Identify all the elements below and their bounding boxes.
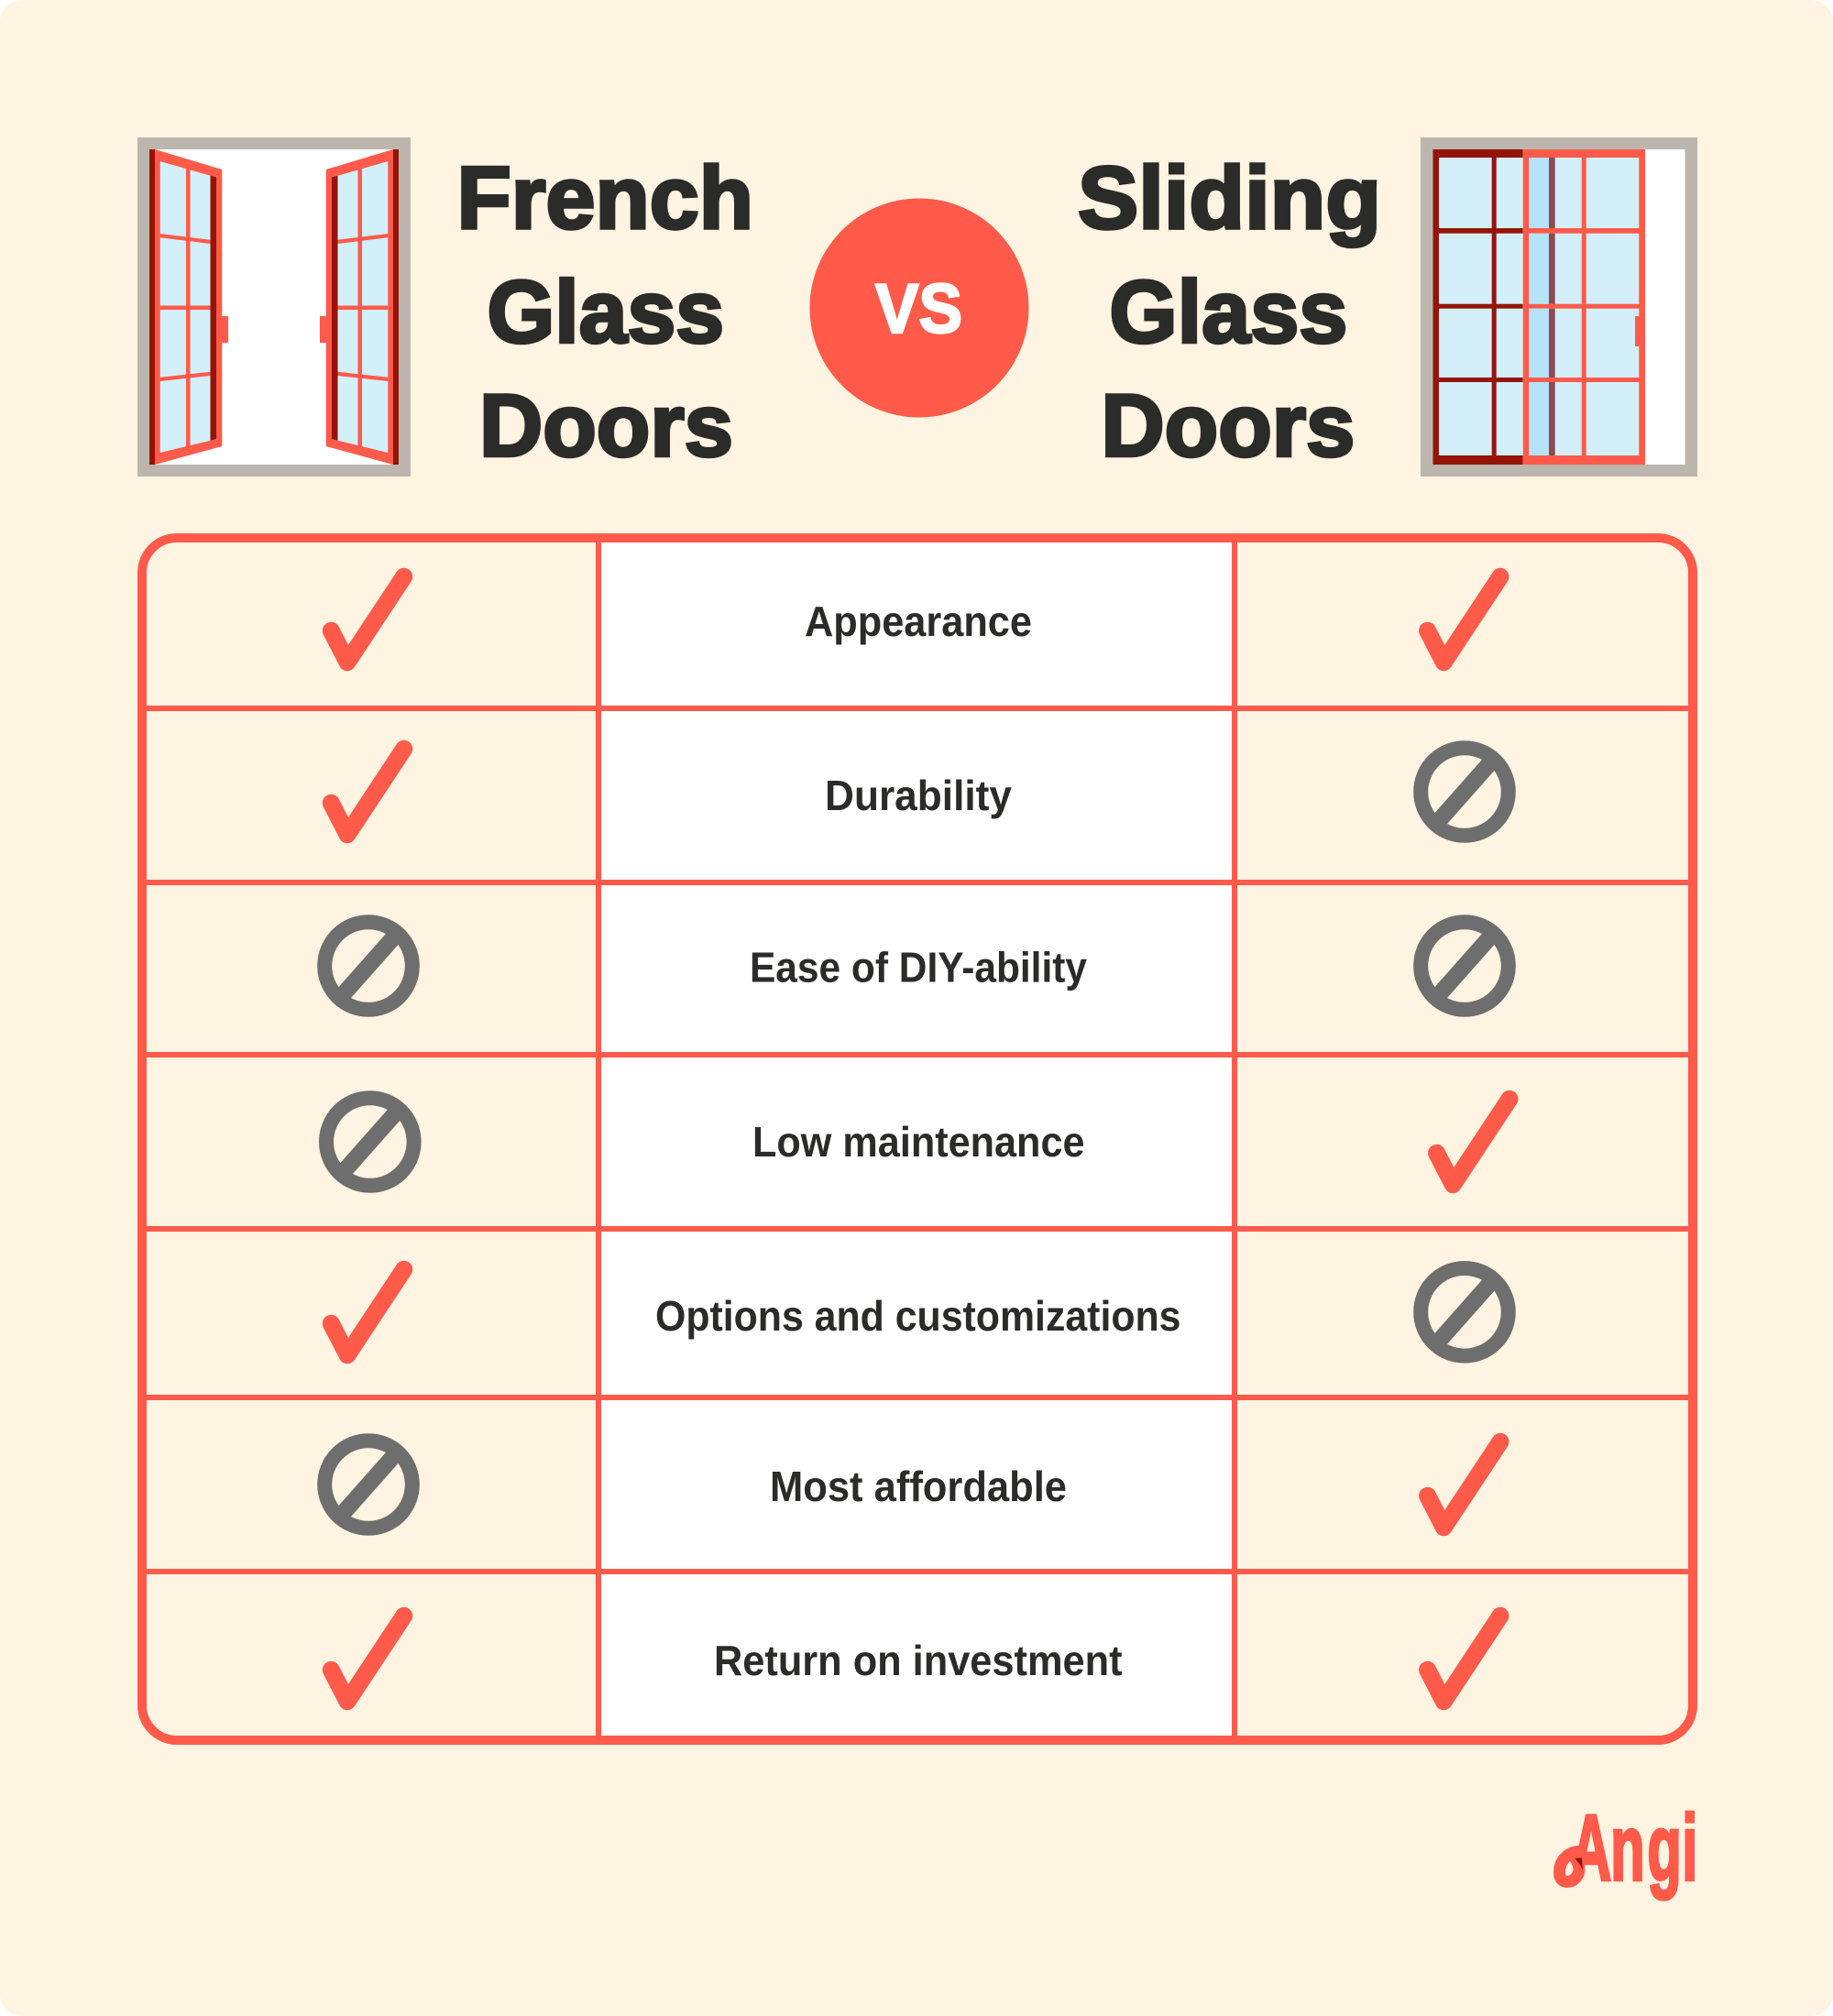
icon: french glass doors — [137, 137, 411, 477]
heading: French Glass Doors: French — [456, 149, 753, 247]
icon: no, French, Low maintenance — [326, 1098, 414, 1186]
icon: no, French, Ease of DIY-ability — [324, 922, 412, 1010]
heading: French Glass Doors — [456, 149, 753, 475]
icon: check, Sliding, Low maintenance — [1437, 1099, 1509, 1185]
icon: no, Sliding, Durability — [1421, 748, 1509, 836]
heading: Sliding Glass Doors: Glass — [1109, 263, 1347, 361]
row label: Most affordable: Most affordable — [770, 1463, 1067, 1510]
icon: check, Sliding, Return on investment — [1428, 1616, 1500, 1702]
row label: Options and customizations: Options and customizations — [655, 1292, 1180, 1340]
icon: check, French, Appearance — [331, 576, 404, 663]
icon: check, French, Durability — [331, 749, 404, 835]
fixed panel panes — [1439, 158, 1523, 455]
badge: VS — [810, 198, 1028, 418]
sliding panel panes — [1529, 158, 1639, 455]
icon: check, French, Return on investment — [331, 1616, 404, 1702]
row label: Return on investment: Return on investment — [714, 1637, 1122, 1684]
row label: Durability: Durability — [825, 772, 1012, 819]
logo: Angi: Angi — [1571, 1796, 1697, 1901]
icon: no, French, Most affordable — [324, 1441, 412, 1528]
heading: Sliding Glass Doors: Sliding — [1078, 149, 1381, 247]
heading: French Glass Doors: Glass — [488, 263, 724, 361]
icon: sliding glass door — [1421, 137, 1697, 477]
row label: Ease of DIY-ability: Ease of DIY-ability — [750, 943, 1087, 991]
comparison table — [142, 538, 1693, 1740]
heading: Sliding Glass Doors — [1078, 149, 1381, 475]
row label: Low maintenance: Low maintenance — [752, 1118, 1085, 1166]
left door leaf — [149, 149, 228, 465]
row label: Appearance: Appearance — [805, 597, 1032, 645]
heading: French Glass Doors: Doors — [479, 377, 733, 475]
icon: check, Sliding, Appearance — [1428, 576, 1500, 663]
heading: Sliding Glass Doors: Doors — [1101, 377, 1355, 475]
overlap strip — [1529, 158, 1555, 455]
icon: no, Sliding, Options — [1421, 1268, 1509, 1356]
right door leaf — [320, 149, 399, 465]
icon: check, Sliding, Most affordable — [1428, 1441, 1500, 1528]
icon: check, French, Options — [331, 1269, 404, 1355]
icon: no, Sliding, Ease of DIY-ability — [1421, 922, 1509, 1010]
badge: VS: VS — [875, 270, 962, 348]
